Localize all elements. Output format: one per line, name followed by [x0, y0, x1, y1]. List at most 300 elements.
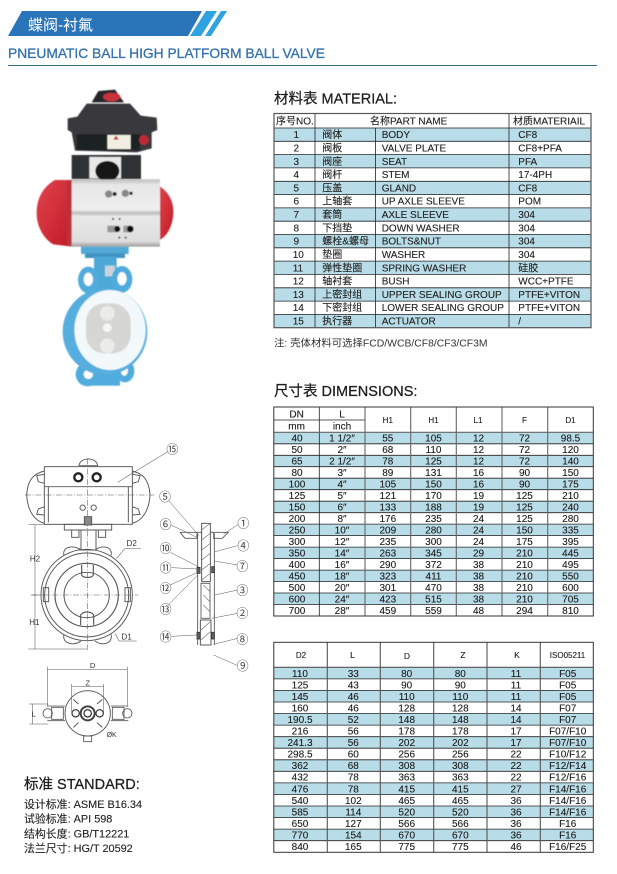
dimensions table 2 rows: 56: [348, 738, 359, 749]
dimensions table 1 rows: 301: [379, 583, 397, 594]
dimensions table 2 rows: 670: [452, 830, 469, 842]
material table rows: 上密封组: [322, 288, 362, 301]
material table rows: STEM: [382, 170, 409, 181]
part number callouts: ②: [236, 607, 248, 621]
material table rows: 阀板: [322, 142, 342, 154]
icon: actuator body: [67, 179, 160, 247]
dimensions table 2 rows: 36: [510, 830, 522, 842]
dimensions table 1 rows: 170: [425, 491, 442, 502]
dimensions table 1 rows: 423: [379, 594, 397, 605]
dimensions table 1 rows: 14″: [335, 548, 350, 559]
dimensions table 1 rows: 500: [289, 583, 306, 594]
dimensions table 1 rows: 100: [289, 480, 306, 490]
dimensions table 1 rows: 72: [519, 445, 530, 456]
material table rows: 13: [293, 290, 304, 301]
icon: mounting bracket: [72, 155, 141, 181]
dimensions table 1 rows: 10″: [335, 525, 350, 536]
material table rows: 阀体: [322, 128, 342, 141]
dimensions table 1 rows: 2″: [337, 445, 347, 456]
dimensions table 2 rows: 432: [292, 773, 309, 784]
material table rows: CF8+PFA: [518, 144, 562, 154]
dimensions table 2 rows: 11: [511, 669, 522, 680]
dimensions table 1 rows: 16: [473, 468, 484, 479]
dimensions table 1 rows: 209: [379, 525, 397, 536]
dimensions table 2 rows: 520: [452, 807, 469, 818]
dimensions table 2 rows: 78: [348, 773, 359, 784]
dimensions table 2 rows: F05: [559, 669, 577, 680]
material table rows: PTFE+VITON: [518, 303, 580, 314]
part number callouts: ③: [236, 583, 248, 597]
dimensions table 2 rows: 148: [398, 715, 415, 726]
dimensions table 2 rows: 148: [452, 715, 469, 726]
dimensions table 2 rows: F10/F12: [549, 750, 587, 761]
dimensions table 1 rows: 80: [291, 468, 303, 479]
dimensions table 2 rows: 178: [452, 727, 469, 738]
dimensions table 2 rows: 102: [345, 796, 362, 807]
dimensions table 1 rows: 495: [562, 560, 579, 571]
material table header: 名称PART NAME: [370, 114, 448, 128]
dimensions table 2 rows: 770: [292, 830, 309, 842]
dimensions table 2 rows: 256: [398, 750, 415, 761]
material table rows: BOLTS&NUT: [382, 237, 441, 248]
dimensions table 1 rows: 550: [562, 571, 579, 582]
dimensions table 2 rows: 22: [510, 761, 522, 772]
dimensions table 2 rows: 36: [510, 796, 522, 807]
material table rows: 下挡垫: [322, 221, 352, 234]
dimensions table 2 rows: 27: [510, 784, 522, 795]
material table rows: PFA: [518, 157, 538, 168]
top view drawing: D: [90, 661, 96, 670]
dimensions table 1 rows: 24″: [335, 594, 350, 605]
standards block: [24, 776, 142, 855]
dimensions table 2 rows: 566: [398, 819, 415, 830]
dimensions table 2 rows: 308: [452, 761, 469, 772]
dimensions table 1 rows: 445: [562, 548, 579, 559]
dimensions table 1 rows: 125: [516, 491, 533, 502]
dimensions table 1 rows: 300: [289, 537, 306, 548]
material table rows: PTFE+VITON: [518, 290, 580, 301]
section heading: standard: 标准 STANDARD:: [24, 776, 140, 793]
material table rows: CF8: [518, 130, 538, 141]
material table rows: 11: [293, 263, 304, 274]
dimensions table 1 rows: 323: [379, 571, 397, 582]
dimensions table 2 rows: 90: [401, 681, 413, 692]
icon: valve neck: [81, 247, 129, 292]
dimensions table 1 rows: 250: [289, 525, 306, 536]
dimensions table 2 rows: 465: [398, 796, 415, 807]
material table rows: 1: [294, 130, 300, 141]
standards list: 试验标准: API 598: [24, 812, 112, 826]
dimensions table 1 rows: 125: [516, 502, 533, 514]
dimensions table 2 rows: 46: [348, 704, 359, 715]
material table rows: CF8: [518, 183, 538, 194]
material table rows: SPRING WASHER: [382, 263, 466, 274]
material table rows: 14: [293, 303, 304, 314]
dimensions table 1 rows: 290: [379, 560, 397, 571]
header banner: 蝶阀-衬氟: [28, 17, 93, 34]
part number callouts: ⑭: [160, 630, 172, 644]
material table rows: 10: [293, 250, 304, 261]
material table rows: 304: [518, 250, 535, 261]
dimensions table 1 header: mm: [288, 422, 305, 433]
part number callouts: [159, 443, 249, 673]
dimensions table 1 rows: 210: [516, 548, 533, 559]
part number callouts: ⑮: [166, 443, 178, 457]
dimensions table 1 rows: 345: [425, 548, 442, 559]
dimensions table 2 rows: 308: [398, 761, 415, 772]
dimensions table 1 rows: 600: [562, 583, 579, 594]
dimensions table 2 rows: 36: [510, 819, 522, 830]
material table rows: BUSH: [382, 277, 409, 288]
dimensions table 2 rows: 56: [348, 727, 359, 738]
dimensions table 2 rows: F16: [559, 819, 577, 830]
dimensions table 2 rows: 46: [348, 692, 359, 703]
material table rows: 阀杆: [322, 168, 342, 181]
material table rows: POM: [518, 197, 541, 208]
dimensions table 1 rows: [289, 434, 581, 617]
dimensions table 2 rows: 80: [401, 669, 413, 680]
dimensions table 2 rows: 125: [292, 681, 309, 692]
dimensions table 2 rows: 160: [292, 704, 309, 715]
material table rows: 套筒: [322, 208, 342, 221]
dimensions table 1 rows: 120: [562, 445, 579, 456]
material table rows: 螺栓&螺母: [322, 235, 369, 248]
dimensions table 1 rows: 38: [473, 560, 484, 571]
dimensions table 2 rows: 145: [292, 692, 309, 703]
dimensions table 1 rows: 8″: [337, 514, 347, 525]
dimensions table 1 rows: 6″: [337, 502, 347, 514]
material table rows: 执行器: [322, 314, 352, 328]
part number callouts: ⑥: [160, 518, 172, 532]
dimensions table 1 rows: 110: [426, 445, 442, 456]
dimensions table 2 rows: 476: [292, 784, 309, 795]
dimensions table 2 header: ISO05211: [550, 651, 586, 660]
material table rows: 弹性垫圈: [322, 261, 362, 274]
material table header: 序号NO.: [276, 114, 314, 128]
material table rows: 304: [518, 223, 535, 234]
dimensions table 1 rows: 150: [516, 525, 533, 536]
material table rows: 3: [294, 157, 300, 168]
dimensions table 1 rows: 235: [425, 514, 442, 525]
dimensions table 1 header: DN: [289, 410, 304, 421]
dimensions table 2 rows: 154: [345, 830, 362, 842]
material table rows: 5: [294, 183, 300, 194]
dimensions table 2 rows: 840: [292, 842, 309, 853]
dimensions table 2 rows: 256: [452, 750, 469, 761]
dimensions table 2 rows: 78: [348, 784, 359, 795]
part number callouts: ④: [237, 539, 249, 553]
material table rows: 304: [518, 237, 535, 248]
dimensions table 1 rows: 210: [562, 491, 579, 502]
material table rows: WCC+PTFE: [518, 277, 574, 288]
dimensions table 1 rows: 700: [289, 606, 306, 617]
section heading: material: 材料表 MATERIAL:: [274, 90, 397, 107]
dimensions table 2 rows: 520: [398, 807, 415, 818]
dimensions table 1 header: D1: [565, 416, 576, 425]
dimensions table 1 rows: 188: [425, 502, 442, 514]
dimensions table 2 rows: 216: [292, 727, 309, 738]
material table rows: UPPER SEALING GROUP: [382, 290, 502, 301]
material table rows: LOWER SEALING GROUP: [382, 303, 504, 314]
dimensions table 1 rows: 38: [473, 594, 484, 605]
material table rows: 下密封组: [322, 301, 362, 314]
dimensions table 2 rows: 14: [510, 715, 522, 726]
standards list: [24, 797, 142, 855]
dimensions table 1 rows: 16: [473, 480, 484, 490]
material table rows: 4: [294, 170, 300, 181]
dimensions table 2 header: Z: [460, 650, 466, 660]
dimensions table 1 rows: 125: [289, 491, 306, 502]
dimensions table 1 rows: 89: [382, 468, 394, 479]
dimensions table 1 rows: 68: [382, 445, 394, 456]
part number callouts: ⑦: [236, 559, 248, 573]
dimensions table 2 rows: 298.5: [287, 750, 313, 761]
dimensions table 1 rows: 98.5: [561, 434, 581, 445]
dimensions table 1 rows: 48: [473, 606, 484, 617]
dimensions table 1 rows: 4″: [337, 480, 347, 490]
dimensions table 1 rows: 12: [473, 445, 484, 456]
dimensions table 1 rows: 400: [289, 560, 306, 571]
material table rows: WASHER: [382, 250, 425, 261]
dimensions table 2 rows: [287, 669, 587, 853]
dimensions table 1 header: L: [339, 410, 345, 421]
title: PNEUMATIC BALL HIGH PLATFORM BALL VALVE: [8, 46, 325, 61]
dimensions table 2 rows: 650: [292, 819, 309, 830]
dimensions table 1 rows: 200: [289, 514, 306, 525]
material table rows: 压盖: [322, 181, 342, 194]
material table rows: 硅胶: [518, 261, 538, 274]
dimensions table 1 rows: 600: [289, 594, 306, 605]
dimensions table 2 rows: 17: [510, 738, 522, 749]
dimensions table 2 rows: 17: [510, 727, 522, 738]
dimensions table 1 rows: 559: [425, 606, 442, 617]
dimensions table 1 header: [288, 410, 576, 433]
standards list: 结构长度: GB/T12221: [24, 826, 129, 840]
part number callouts: ⑫: [160, 582, 172, 596]
dimensions table 2 rows: F14/F16: [549, 784, 587, 795]
dimensions table 2 rows: 43: [348, 681, 359, 692]
dimensions table 2 header: D2: [296, 651, 307, 660]
dimensions table 2 rows: 33: [348, 669, 359, 680]
dimensions table 2 rows: 363: [452, 773, 469, 784]
dimensions table 1 rows: 105: [425, 434, 442, 445]
leader line: actuator callout: [118, 452, 168, 482]
part number callouts: ⑤: [159, 490, 171, 504]
material table rows: BODY: [382, 130, 410, 141]
dimensions table 2 rows: F05: [559, 681, 577, 692]
dimensions table 1 rows: 90: [519, 468, 530, 479]
dimensions table 1 rows: 263: [379, 548, 397, 559]
dimensions table 1 rows: 72: [519, 434, 530, 445]
dimensions table 1 rows: 24: [473, 537, 484, 548]
dimensions table 2 rows: 36: [510, 807, 522, 818]
dimensions table 2 rows: 362: [292, 761, 309, 772]
part number callouts: ①: [237, 517, 249, 531]
dimensions table 1: [274, 407, 593, 617]
part number callouts: ⑨: [237, 659, 249, 673]
dimensions table 1 rows: 705: [562, 594, 579, 605]
material table rows: 9: [294, 237, 300, 248]
dimensions table 2 header: [296, 650, 586, 661]
icon: red end cap right: [159, 186, 173, 240]
dimensions table 2 rows: 202: [398, 738, 415, 749]
dimensions table 2 rows: 363: [398, 773, 415, 784]
dimensions table 2 rows: 190.5: [287, 715, 313, 726]
dimensions table 1 rows: 140: [562, 457, 579, 468]
dimensions table 2 rows: 11: [511, 692, 522, 703]
dimensions table 2: [274, 642, 593, 853]
dimensions table 2 rows: F14/F16: [549, 807, 587, 818]
dimensions table 1 rows: 175: [516, 537, 533, 548]
dimensions table 2 rows: F07: [559, 715, 577, 726]
header banner: [8, 11, 227, 36]
leader lines: [168, 501, 238, 666]
material table rows: 垫圈: [322, 248, 342, 261]
dimensions table 2 header: D: [404, 651, 410, 661]
dimensions table 2 rows: 128: [452, 704, 469, 715]
dimensions table 1 rows: 235: [379, 537, 397, 548]
dimensions table 1 rows: 24: [473, 525, 484, 536]
dimensions table 2 rows: 52: [348, 715, 359, 726]
dimensions table 1 rows: 18″: [335, 571, 350, 582]
dimensions table 1 rows: 280: [425, 525, 442, 536]
dimensions table 2 header: K: [514, 650, 520, 660]
dimensions table 1 header: F: [522, 416, 527, 425]
part number callouts: ⑪: [160, 561, 172, 575]
dimensions table 1 rows: 335: [562, 525, 579, 536]
dimensions table 1 rows: 515: [425, 594, 442, 605]
dimensions table 2 rows: 114: [345, 807, 362, 818]
front drawing dimension labels: D1: [122, 632, 132, 641]
material table rows: /: [518, 316, 521, 328]
top view drawing: Z: [85, 679, 90, 688]
material table rows: 8: [294, 223, 300, 234]
dimensions table 2 rows: F12/F16: [549, 773, 587, 784]
material table rows: AXLE SLEEVE: [382, 210, 449, 221]
dimensions table 1 header: L1: [474, 416, 483, 425]
dimensions table 2 rows: 178: [398, 727, 415, 738]
dimensions table 1 rows: 372: [425, 560, 442, 571]
dimensions table 1 rows: 395: [562, 537, 579, 548]
dimensions table 1 rows: 176: [379, 514, 397, 525]
dimensions table 1 rows: 12: [473, 434, 484, 445]
dimensions table 1 rows: 150: [289, 502, 306, 514]
dimensions table 2 header: L: [350, 650, 355, 660]
front drawing dimension labels: D2: [127, 539, 137, 548]
front drawing dimension labels: H2: [30, 555, 41, 564]
dimensions table 1 rows: 350: [289, 548, 306, 559]
dimensions table 1 rows: 210: [516, 583, 533, 594]
material table header: [276, 114, 585, 128]
dimensions table 2 rows: 202: [452, 738, 469, 749]
dimensions table 2 rows: 128: [398, 704, 415, 715]
material table rows: 上轴套: [322, 195, 352, 208]
dimensions table 1 rows: 38: [473, 571, 484, 582]
dimensions table 2 rows: F16/F25: [549, 842, 587, 853]
dimensions table 1 rows: 90: [519, 480, 530, 490]
material table header: 材质MATERIAIL: [513, 114, 585, 128]
icon: valve disc: [86, 303, 131, 353]
material table rows: 2: [294, 144, 300, 154]
dimensions table 2 rows: 46: [510, 842, 522, 853]
dimensions table 1 rows: 131: [425, 468, 442, 479]
material table rows: 7: [294, 210, 300, 221]
dimensions table 1 header: inch: [333, 422, 351, 433]
product photo: pneumatic butterfly valve: [37, 90, 173, 386]
part number callouts: ⑬: [160, 603, 172, 617]
dimensions table 2 rows: F07/F10: [549, 727, 587, 738]
dimensions table 1 rows: 5″: [337, 491, 347, 502]
dimensions table 1 rows: 16″: [335, 560, 350, 571]
dimensions table 1 rows: 19: [473, 502, 484, 514]
dimensions table 1 rows: 12″: [335, 537, 350, 548]
dimensions table 2 rows: F07: [559, 704, 577, 715]
front elevation drawing: [25, 458, 154, 650]
dimensions table 2 rows: 110: [399, 692, 415, 703]
top view drawing: [29, 661, 132, 742]
material table rows: 轴衬套: [322, 275, 352, 288]
dimensions table 2 rows: 110: [452, 692, 469, 703]
dimensions table 1 rows: 210: [516, 560, 533, 571]
icon: red end cap left: [37, 180, 72, 247]
material table rows: 304: [518, 210, 535, 221]
material table: [274, 114, 591, 328]
dimensions table 2 rows: F07/F10: [549, 738, 587, 749]
dimensions table 1 rows: 38: [473, 583, 484, 594]
dimensions table 2 rows: 110: [292, 669, 308, 680]
top view drawing: L: [32, 709, 36, 718]
dimensions table 2 rows: 14: [510, 704, 522, 715]
material table rows: 12: [293, 277, 304, 288]
dimensions table 1 rows: 1 1/2″: [329, 434, 355, 445]
dimensions table 1 rows: 133: [379, 502, 397, 514]
front drawing dimension labels: H1: [29, 618, 40, 627]
dimensions table 1 rows: 40: [291, 434, 303, 445]
dimensions table 2 rows: 60: [348, 750, 359, 761]
dimensions table 2 rows: 90: [455, 681, 466, 692]
icon: valve body ring: [63, 288, 147, 375]
dimensions table 1 rows: 294: [516, 606, 533, 617]
dimensions table 1 header: H1: [428, 416, 439, 425]
dimensions table 2 rows: 241.3: [287, 738, 313, 749]
part number callouts: ⑧: [236, 632, 248, 646]
dimensions table 2 rows: F14/F16: [549, 796, 587, 807]
dimensions table 2 rows: 22: [510, 750, 522, 761]
dimensions table 1 rows: 105: [379, 480, 397, 490]
section view drawing: [180, 523, 228, 645]
dimensions table 1 rows: 12: [473, 457, 484, 468]
top view drawing: ØK: [107, 732, 117, 739]
material table rows: GLAND: [382, 183, 416, 194]
dimensions table 1 rows: 175: [562, 480, 579, 490]
dimensions table 1 rows: 125: [516, 514, 533, 525]
material table rows: [293, 128, 580, 328]
material table rows: 6: [294, 197, 300, 208]
dimensions table 2 rows: 80: [455, 669, 466, 680]
dimensions table 1 rows: 810: [562, 606, 579, 617]
dimensions table 2 rows: 585: [292, 807, 309, 818]
dimensions table 1 rows: 470: [425, 583, 442, 594]
material note: 注: 壳体材料可选择FCD/WCB/CF8/CF3/CF3M: [274, 336, 488, 350]
dimensions table 2 rows: 415: [452, 784, 469, 795]
dimensions table 2 rows: 68: [348, 761, 359, 772]
dimensions table 1 rows: 24: [473, 514, 484, 525]
dimensions table 1 rows: 28″: [335, 606, 350, 617]
icon: valve ears: [76, 266, 134, 386]
dimensions table 1 rows: 50: [291, 445, 303, 456]
dimensions table 2 rows: 22: [510, 773, 522, 784]
dimensions table 2 rows: 127: [345, 819, 362, 830]
